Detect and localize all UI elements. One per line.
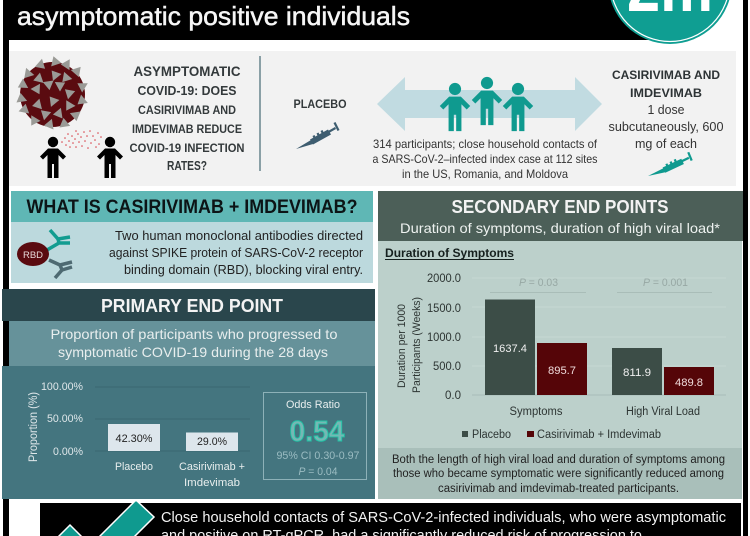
icon: droplet spray xyxy=(61,130,102,149)
study question: CASIRIVIMAB AND xyxy=(138,105,236,117)
treatment arm: mg of each xyxy=(635,136,697,151)
treatment arm: 1 dose xyxy=(648,102,684,117)
bar chart: proportion: Imdevimab xyxy=(184,477,240,489)
heading: PRIMARY END POINT xyxy=(101,296,283,316)
bar chart: duration: P = 0.001 xyxy=(643,277,688,289)
bar chart: duration: 811.9 xyxy=(623,367,651,379)
secondary conclusion text: Both the length of high viral load and duration of symptoms among xyxy=(392,454,725,466)
study question: RATES? xyxy=(167,159,207,173)
bar chart: proportion: 50.00% xyxy=(47,413,83,425)
legend: Placebo xyxy=(472,429,511,441)
secondary conclusion text: those who became symptomatic were significantly reduced among xyxy=(393,468,724,480)
legend xyxy=(462,429,661,441)
treatment arm: CASIRIVIMAB AND xyxy=(612,68,720,82)
bar chart: proportion: 0.00% xyxy=(53,446,83,458)
odds ratio box: Odds Ratio xyxy=(286,399,340,411)
participants text: 314 participants; close household contacts of xyxy=(373,137,598,151)
bar chart: duration: 489.8 xyxy=(675,377,703,389)
legend: Casirivimab + Imdevimab xyxy=(537,429,661,441)
treatment arm xyxy=(608,68,724,179)
study question: COVID-19: DOES xyxy=(138,83,237,98)
panel: conclusion xyxy=(40,502,741,536)
bar chart: duration: 0.0 xyxy=(445,390,461,402)
title: asymptomatic positive individuals xyxy=(17,1,410,31)
icon: coronavirus xyxy=(16,56,90,131)
icon: participants xyxy=(440,77,533,131)
bar chart: duration xyxy=(396,273,726,441)
heading: WHAT IS CASIRIVIMAB + IMDEVIMAB? xyxy=(26,197,358,218)
icon: check mark xyxy=(54,500,154,536)
secondary conclusion text xyxy=(392,454,725,495)
secondary conclusion text: casirivimab and imdevimab-treated participants. xyxy=(438,483,679,495)
icon: antibodies binding RBD: RBD xyxy=(23,250,43,261)
chart heading: Duration of Symptoms xyxy=(385,246,514,260)
bar chart: duration: 2000.0 xyxy=(427,273,461,285)
panel: what is casirivimab + imdevimab xyxy=(11,191,373,283)
description: against SPIKE protein of SARS-CoV-2 receptor xyxy=(109,245,364,260)
panel: primary end point xyxy=(2,289,375,499)
bar chart: proportion: 100.00% xyxy=(41,381,83,393)
description xyxy=(109,228,364,277)
subtitle: Duration of symptoms, duration of high viral load* xyxy=(400,220,721,236)
bar chart: proportion: 29.0% xyxy=(197,436,227,448)
icon: treatment syringe xyxy=(648,149,693,179)
bar chart: proportion: Proportion (%) xyxy=(28,392,40,462)
bar chart: duration: P = 0.03 xyxy=(519,277,558,289)
subtitle: symptomatic COVID-19 during the 28 days xyxy=(58,344,328,360)
bar chart: proportion xyxy=(28,381,250,489)
odds ratio box: 0.54 xyxy=(290,416,344,448)
bar chart: proportion: 42.30% xyxy=(116,433,153,445)
double arrow xyxy=(377,77,602,131)
bar chart: duration: Symptoms xyxy=(510,406,563,418)
participants text xyxy=(372,137,598,181)
panel: study design xyxy=(9,51,736,186)
odds ratio box: P = 0.04 xyxy=(298,466,338,478)
bar chart: proportion: Casirivimab + xyxy=(179,461,245,473)
icon: placebo syringe xyxy=(296,122,340,149)
heading: SECONDARY END POINTS xyxy=(452,197,668,217)
panel: secondary end points xyxy=(378,191,743,499)
placebo arm xyxy=(294,97,346,149)
odds ratio box xyxy=(264,392,366,480)
conclusion text: Close household contacts of SARS-CoV-2-infected individuals, who were asymptomatic xyxy=(161,510,726,526)
treatment arm: subcutaneously, 600 xyxy=(608,119,724,134)
bar chart: duration: 1000.0 xyxy=(427,332,461,344)
bar chart: duration: 1637.4 xyxy=(493,343,527,355)
odds ratio box: 95% CI 0.30-0.97 xyxy=(276,450,360,462)
icon: two people xyxy=(40,137,123,178)
bar chart: duration: 1500.0 xyxy=(427,303,461,315)
description: Two human monoclonal antibodies directed xyxy=(115,228,363,243)
participants text: a SARS-CoV-2–infected index case at 112 sites xyxy=(372,152,598,166)
description: binding domain (RBD), blocking viral entry. xyxy=(124,262,363,277)
conclusion text xyxy=(161,510,726,536)
bar chart: proportion: Placebo xyxy=(115,461,153,473)
treatment arm: IMDEVIMAB xyxy=(630,86,702,100)
bar chart: duration: Duration per 1000 xyxy=(396,304,408,388)
study question xyxy=(130,64,244,173)
bar chart: duration: Participants (Weeks) xyxy=(411,297,423,393)
logo xyxy=(608,0,732,44)
placebo arm: PLACEBO xyxy=(294,97,346,111)
study question: ASYMPTOMATIC xyxy=(134,64,241,79)
bar chart: duration: High Viral Load xyxy=(626,406,700,418)
study question: COVID-19 INFECTION xyxy=(130,141,244,155)
participants text: in the US, Romania, and Moldova xyxy=(402,167,568,181)
bar chart: duration: 500.0 xyxy=(433,361,461,373)
subtitle: Proportion of participants who progressed to xyxy=(50,326,338,342)
study question: IMDEVIMAB REDUCE xyxy=(132,124,242,136)
subtitle xyxy=(50,326,338,360)
bar chart: duration: 895.7 xyxy=(548,365,576,377)
icon: antibodies binding RBD xyxy=(17,230,72,278)
